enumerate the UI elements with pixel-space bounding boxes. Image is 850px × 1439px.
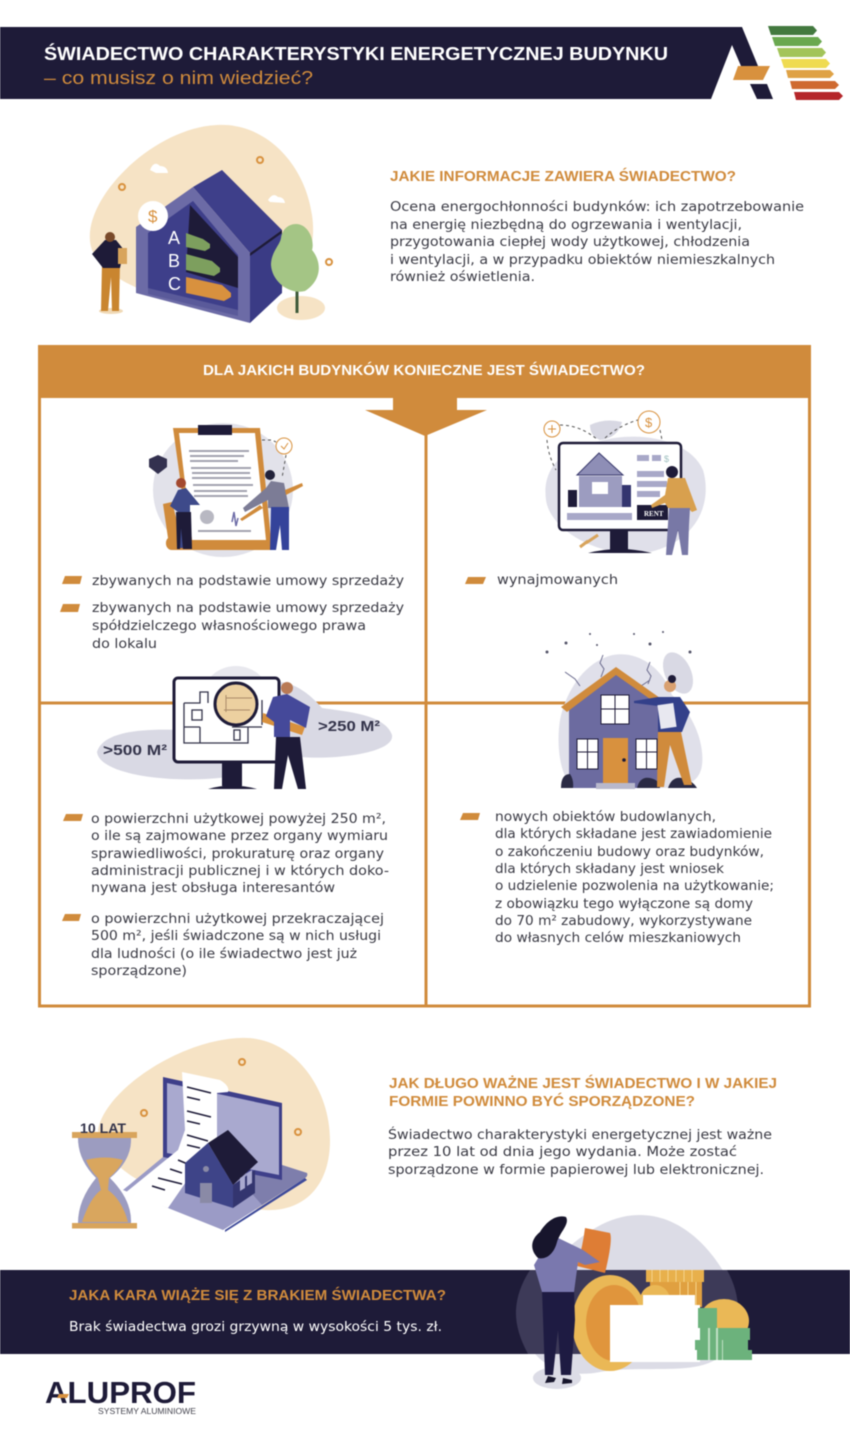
text: do lokalu — [92, 637, 157, 652]
letters A B C: C — [168, 274, 181, 294]
section: what information — [390, 167, 804, 285]
paragraph: również oświetlenia. — [390, 269, 535, 285]
blob shade over band — [516, 1270, 738, 1354]
person — [651, 478, 697, 512]
pencil — [240, 483, 303, 521]
text: o powierzchni użytkowej przekraczającej — [91, 912, 384, 927]
bullet — [63, 814, 83, 821]
text — [92, 601, 404, 652]
panel header with arrow — [38, 345, 811, 436]
text: z obowiązku tego wyłączone są domy — [495, 897, 753, 912]
text — [495, 809, 774, 946]
text: dla których składane jest zawiadomienie — [495, 826, 772, 842]
woman — [634, 697, 690, 732]
text: sprawiedliwości, prokuraturę oraz organy — [91, 846, 384, 862]
subtitle: – co musisz o nim wiedzieć? — [44, 67, 313, 88]
house — [136, 170, 282, 323]
white cover — [610, 1295, 700, 1362]
small house — [185, 1130, 258, 1208]
heading: JAKA KARA WIĄŻE SIĘ Z BRAKIEM ŚWIADECTWA? — [69, 1286, 446, 1304]
text: spółdzielczego własnościowego prawa — [92, 618, 366, 634]
paragraph: sporządzone w formie papierowej lub elektronicznej. — [388, 1163, 764, 1178]
paragraph: i wentylacji, a w przypadku obiektów niemieszkalnych — [390, 252, 775, 268]
text: 500 m², jeśli świadczone są w nich usługi — [91, 928, 381, 944]
clouds — [150, 164, 285, 203]
dollar badge — [138, 201, 168, 231]
text: zbywanych na podstawie umowy sprzedaży — [92, 574, 404, 589]
feet shadow — [533, 1367, 581, 1389]
text: do 70 m² zabudowy, wykorzystywane — [495, 914, 752, 929]
energy arrows — [186, 233, 210, 251]
banner background with logo A — [0, 27, 758, 99]
illustration: monitor: RENT — [644, 510, 664, 518]
bullet — [62, 576, 82, 584]
paragraph: na energię niezbędną do ogrzewania i wentylacji, — [390, 218, 742, 233]
paragraph — [388, 1125, 772, 1178]
heading: JAKIE INFORMACJE ZAWIERA ŚWIADECTWO? — [390, 167, 736, 185]
text: nowych obiektów budowlanych, — [495, 809, 716, 825]
peach blob — [98, 1038, 330, 1210]
dollar badge: $ — [148, 207, 158, 226]
bullet — [460, 813, 480, 820]
orange card — [577, 1228, 611, 1273]
laptop — [123, 1077, 307, 1232]
text: sporządzone) — [91, 964, 187, 979]
text: o powierzchni użytkowej powyżej 250 m², — [91, 812, 386, 827]
banknotes — [695, 1308, 752, 1360]
logo wordmark: ALUPROF — [45, 1375, 196, 1410]
cell: sale — [60, 423, 404, 652]
key — [163, 502, 190, 550]
heading: JAK DŁUGO WAŻNE JEST ŚWIADECTWO I W JAKIEJ — [389, 1074, 777, 1092]
tree — [271, 224, 325, 320]
illustration: new house — [546, 631, 702, 789]
illustration: monitor — [544, 411, 706, 555]
letters A B C: B — [168, 251, 180, 271]
bullet — [60, 604, 80, 612]
paragraph: Świadectwo charakterystyki energetycznej jest ważne — [388, 1125, 772, 1143]
peach blob — [90, 125, 313, 303]
logo tagline: SYSTEMY ALUMINIOWE — [98, 1407, 196, 1416]
illustration: contract — [149, 423, 303, 557]
text: wynajmowanych — [497, 573, 618, 588]
woman — [170, 488, 200, 548]
band background — [0, 1270, 850, 1354]
logo: Aluprof — [45, 1375, 196, 1416]
header banner — [0, 26, 843, 100]
panel: which buildings — [38, 345, 811, 1006]
letters A B C — [168, 228, 181, 294]
logo A orange bar — [733, 66, 770, 80]
paragraph: Ocena energochłonności budynków: ich zapotrzebowanie — [390, 199, 804, 215]
bullet — [465, 577, 486, 584]
text: administracji publicznej i w których doko- — [91, 863, 389, 879]
penalty band — [0, 1270, 850, 1354]
paper receipt — [125, 1072, 228, 1208]
text: o ile są zajmowane przez organy wymiaru — [91, 829, 388, 844]
man — [243, 481, 289, 512]
paragraph: przez 10 lat od dnia jego wydania. Może zostać — [388, 1144, 737, 1160]
section: validity — [388, 1074, 777, 1178]
heading: FORMIE POWINNO BYĆ SPORZĄDZONE? — [389, 1092, 695, 1110]
heading — [389, 1074, 777, 1110]
label 10 lat: 10 LAT — [80, 1120, 126, 1136]
illustration: validity, laptop and hourglass — [72, 1038, 330, 1232]
decorative dots — [119, 157, 332, 265]
illustration: woman with coins — [516, 1215, 752, 1389]
letters A B C: A — [168, 228, 180, 248]
label 500: >500 M² — [103, 742, 167, 759]
paragraph: przygotowania ciepłej wody użytkowej, chłodzenia — [390, 235, 750, 250]
illustration: energy class house — [90, 125, 332, 323]
bullet — [62, 914, 81, 921]
decorative dots — [141, 1059, 301, 1135]
hourglass — [72, 1132, 137, 1228]
title: ŚWIADECTWO CHARAKTERYSTYKI ENERGETYCZNEJ BUDYNKU — [44, 43, 668, 64]
paragraph — [390, 199, 804, 285]
cell: area — [62, 666, 392, 979]
text: o zakończeniu budowy oraz budynków, — [495, 844, 764, 860]
text: dla których składany jest wniosek — [495, 861, 724, 877]
illustration: floor plan — [97, 666, 392, 789]
text: o udzielenie pozwolenia na użytkowanie; — [495, 879, 774, 894]
person with clipboard — [92, 232, 127, 314]
text: nywana jest obsługa interesantów — [91, 880, 335, 896]
logo accent — [57, 1394, 69, 1398]
text: Brak świadectwa grozi grzywną w wysokości 5 tys. zł. — [69, 1319, 442, 1335]
text — [91, 912, 384, 979]
large coin — [572, 1275, 648, 1371]
cell: new buildings — [460, 631, 774, 946]
panel heading: DLA JAKICH BUDYNKÓW KONIECZNE JEST ŚWIADECTWO? — [203, 361, 645, 379]
text: do własnych celów mieszkaniowych — [495, 930, 741, 946]
gray blob — [520, 1215, 739, 1374]
text: zbywanych na podstawie umowy sprzedaży — [92, 601, 404, 616]
woman — [532, 1216, 600, 1384]
illustration: monitor: $ — [664, 454, 669, 464]
coin stack — [640, 1270, 704, 1315]
label 250: >250 M² — [318, 718, 380, 735]
energy class bars — [768, 26, 843, 100]
illustration: monitor: $ — [645, 415, 653, 430]
text: dla ludności (o ile świadectwo jest już — [91, 946, 357, 962]
panel frame and grid — [39, 380, 810, 1006]
logo A lower leg — [750, 84, 773, 99]
coin inner — [586, 1285, 642, 1361]
text — [91, 812, 389, 896]
cell: rent — [465, 411, 706, 588]
right coin — [699, 1299, 749, 1343]
